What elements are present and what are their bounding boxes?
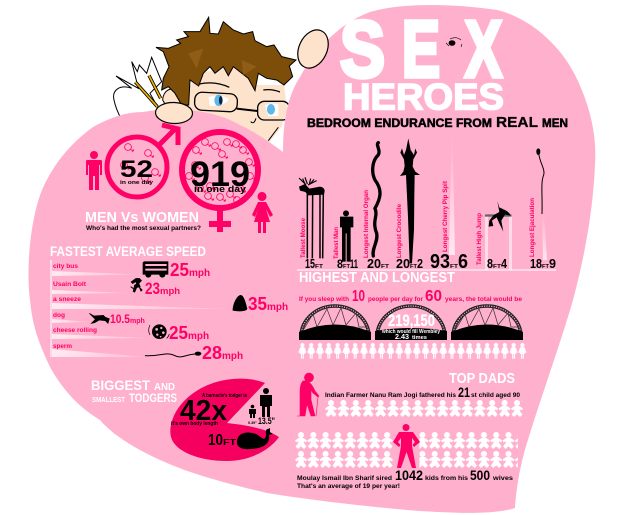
speed values: mph	[130, 318, 145, 325]
title: Sex Heroes: X	[465, 4, 502, 94]
icons: speed silhouettes	[89, 261, 247, 357]
rotated record labels: Tallest High Jump	[476, 213, 483, 265]
speed values: 23	[145, 279, 160, 298]
heading: biggest and smallest todgers: SMALLEST	[92, 397, 126, 404]
text: Moulay Ismail fact: kids from his	[425, 475, 468, 482]
text: Moulay Ismail fact	[297, 467, 513, 490]
icon: woman	[252, 192, 273, 233]
panel: highest and longest chart	[297, 133, 556, 273]
heading: biggest and smallest todgers: BIGGEST	[91, 377, 150, 393]
text: Nanu Ram Jogi fact	[325, 384, 520, 400]
record values: 6	[458, 251, 468, 273]
speed values: 25	[170, 260, 189, 280]
text: Moulay Ismail fact: 500	[470, 467, 490, 483]
icon: organ	[373, 143, 380, 256]
icon: man	[86, 151, 102, 190]
speed labels: a sneeze	[53, 296, 81, 303]
text: Moulay Ismail fact: 1042	[395, 467, 423, 483]
heading: biggest and smallest todgers	[91, 377, 177, 405]
icon: Moulay Ismail	[393, 424, 420, 468]
icon: tallest man	[340, 210, 353, 262]
chart: male symbol 52: in one day	[120, 180, 154, 186]
rotated record labels: Longest Crocodile	[396, 204, 403, 258]
subtitle: bedroom endurance: BEDROOM ENDURANCE FROM	[307, 118, 492, 130]
text: Moulay Ismail fact: wives	[492, 475, 513, 482]
row of babies: Jogi	[325, 400, 523, 418]
text: barnacle fact: 42x	[180, 395, 227, 427]
panel: biggest and smallest todgers	[91, 377, 279, 461]
icon: small bug	[446, 38, 462, 47]
record values: 9	[549, 256, 556, 271]
record values: FT	[542, 264, 550, 270]
speed labels: cheese rolling	[53, 327, 97, 334]
speed streaks	[52, 271, 232, 357]
icon: big and small men: 0.39"	[248, 420, 257, 425]
icon: Wembley stadium centre	[375, 306, 447, 340]
silhouettes	[299, 138, 544, 263]
speed labels: city bus	[53, 263, 78, 270]
title: Sex Heroes: HEROES	[343, 76, 504, 118]
text: sleep sentence: If you sleep with	[299, 296, 349, 303]
chart: female symbol 919: in one day	[194, 184, 246, 194]
chart: female symbol 919: 919	[190, 155, 250, 194]
speed values: 25	[169, 323, 188, 343]
speed values: mph	[222, 351, 243, 362]
icon: face	[163, 65, 289, 143]
text: barnacle fact: it's own body length	[171, 421, 218, 427]
icon: whale with 10 FT label: FT	[223, 438, 236, 447]
rotated record labels: Longest Cherry Pip Spit	[442, 180, 449, 252]
record values: FT	[450, 264, 459, 270]
icon: Wembley stadium left	[299, 306, 371, 340]
record values: 4	[501, 256, 508, 271]
text: Moulay Ismail fact: Moulay Ismail Ibn Sharif sired	[297, 475, 392, 482]
chart: pacman shape	[170, 379, 279, 461]
icon: big and small men: 13.5"	[258, 416, 275, 426]
rotated record labels: Longest Internal Organ	[363, 190, 370, 258]
icon: left hand	[155, 102, 193, 124]
record values: FT	[493, 264, 502, 270]
icon: arrows	[135, 75, 161, 107]
panel: top dads	[295, 370, 523, 490]
chart: male symbol 52	[107, 125, 178, 197]
icon: hair	[156, 17, 296, 105]
subtitle: bedroom endurance	[307, 114, 568, 131]
record values: 20	[367, 256, 381, 271]
title: Sex Heroes: S	[340, 4, 385, 94]
record values: 11	[350, 257, 358, 271]
panel: fastest average speed	[50, 243, 288, 363]
record values: 15	[305, 256, 315, 271]
record values	[305, 251, 556, 273]
title: Sex Heroes	[340, 4, 504, 118]
icon: Wembley stadium right	[451, 306, 523, 340]
icon: crocodile	[400, 138, 420, 263]
text: 219,150 total: 2.43	[395, 332, 409, 341]
text: Nanu Ram Jogi fact: Indian Farmer Nanu Ram Jogi fathered his	[325, 392, 456, 399]
speed labels: Usain Bolt	[53, 281, 87, 288]
rotated record labels: Tallest Moose	[300, 218, 307, 258]
heading: top dads: TOP DADS	[449, 370, 515, 387]
icon: whale with 10 FT label: 10	[208, 432, 223, 449]
icon: whale with 10 FT label	[208, 428, 273, 449]
record values: FT	[315, 264, 324, 270]
text: Nanu Ram Jogi fact: 21	[458, 384, 470, 400]
chart: female symbol 919	[182, 132, 258, 232]
icon: high jumper	[485, 201, 512, 232]
icon: right hand	[292, 25, 334, 73]
record values: 2	[417, 256, 423, 271]
text: 219,150 total: times	[412, 335, 427, 341]
panel: Wembley sentence and domes	[298, 288, 527, 359]
record values: 8	[337, 257, 343, 271]
speed labels: dog	[53, 312, 65, 319]
rotated record labels: Tallest Man	[333, 227, 340, 259]
icon: old man with cane	[297, 373, 319, 416]
record values: FT	[410, 264, 418, 270]
heading: highest and longest: HIGHEST AND LONGEST	[299, 270, 455, 286]
icon: moose	[299, 177, 325, 258]
text: 219,150 total	[381, 311, 440, 341]
speed values	[110, 260, 288, 363]
heading: biggest and smallest todgers: TODGERS	[129, 391, 177, 405]
text: sleep sentence: 10	[352, 288, 365, 305]
subtitle: bedroom endurance: REAL	[496, 114, 538, 131]
babies: right of Moulay Ismail	[419, 432, 518, 470]
subtitle: bedroom endurance: MEN	[542, 118, 568, 130]
speed values: 35	[248, 294, 267, 314]
speed values: mph	[189, 268, 210, 279]
record values: 8	[487, 256, 493, 271]
icon: big and small men	[248, 388, 275, 426]
rotated record labels	[300, 180, 536, 265]
text: 219,150 total: 219,150	[388, 311, 435, 330]
panel: men vs women	[85, 125, 273, 233]
text: sleep sentence: people per day for	[368, 296, 423, 303]
title: Sex Heroes: E	[402, 4, 440, 94]
speed values: mph	[160, 286, 180, 297]
speed values: mph	[267, 302, 288, 313]
chart: male symbol 52: 52	[120, 156, 153, 183]
text: barnacle fact	[171, 393, 247, 427]
record values: 93	[430, 251, 450, 273]
text: sleep sentence	[299, 288, 522, 305]
speed values: 10.5	[110, 312, 130, 326]
record values: FT	[381, 264, 390, 270]
record values: 20	[396, 256, 410, 271]
record values: 18	[530, 256, 542, 271]
speed labels	[53, 263, 97, 350]
record values: FT	[343, 264, 351, 270]
row of women icons	[298, 343, 527, 359]
heading: men vs women: MEN Vs WOMEN	[85, 209, 199, 226]
icon: record sperm	[536, 148, 544, 214]
speed values: mph	[188, 331, 209, 342]
icon: wings	[114, 57, 162, 122]
heading: biggest and smallest todgers: AND	[154, 382, 175, 393]
babies: left of Moulay Ismail	[295, 432, 393, 470]
text: sleep sentence: 60	[425, 288, 442, 305]
heading: fastest average speed: FASTEST AVERAGE SPEED	[50, 243, 206, 259]
character: cupid boy peeking behind heart	[114, 17, 296, 143]
text: 219,150 total: which would fill Wembley	[381, 329, 440, 335]
rotated record labels: Longest Ejaculation	[529, 198, 536, 257]
text: Nanu Ram Jogi fact: st child aged 90	[471, 392, 520, 399]
text: barnacle fact: A barnacle's todger is	[202, 393, 247, 399]
text: sleep sentence: years, the total would be	[445, 296, 522, 303]
text: sexual partners question: Who's had the most sexual partners?	[86, 225, 201, 232]
speed values: 28	[202, 343, 222, 363]
text: Moulay Ismail fact: That's an average of 19 per year!	[297, 483, 400, 490]
speed labels: sperm	[53, 343, 72, 350]
streaks and high jump posts	[449, 133, 547, 270]
